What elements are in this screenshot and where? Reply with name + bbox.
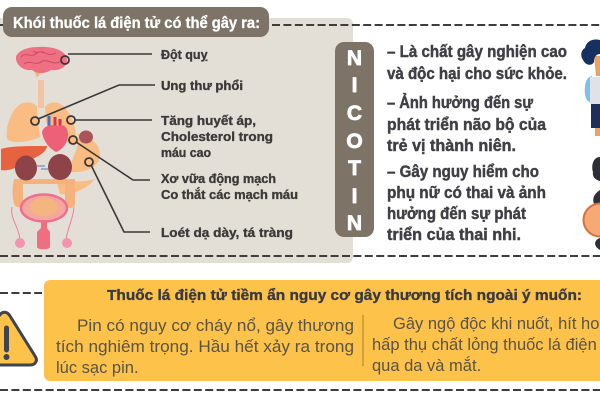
heading: organ effects: Khói thuốc lá điện tử có thể gây ra: xyxy=(13,15,260,32)
text block: brain development: phát triển não bộ của xyxy=(387,116,547,134)
text block: battery risk: Pin có nguy cơ cháy nổ, gây thương xyxy=(77,317,354,335)
text block: battery risk xyxy=(56,317,354,377)
text block: brain development: trẻ vị thành niên. xyxy=(387,137,516,155)
organ: stomach xyxy=(71,134,100,172)
connector: stroke xyxy=(61,54,152,64)
label: ulcers: Loét dạ dày, tá tràng xyxy=(161,226,293,240)
text block: nicotine addiction xyxy=(387,43,567,83)
connector: atherosclerosis xyxy=(69,136,150,180)
panel: organ effects background xyxy=(0,18,353,263)
heading: injury risk: Thuốc lá điện tử tiềm ẩn nguy cơ gây thương tích ngoài ý muốn: xyxy=(107,287,582,304)
vertical label: NICOTIN: I xyxy=(352,74,357,97)
label: stroke: Đột quỵ xyxy=(161,48,208,62)
organ: spleen xyxy=(79,130,93,144)
text block: pregnancy risk: phụ nữ có thai và ảnh xyxy=(387,184,546,202)
text block: poisoning risk xyxy=(372,315,600,375)
connector: hypertension xyxy=(67,116,152,124)
organ: heart xyxy=(42,116,68,152)
text block: pregnancy risk: – Gây nguy hiểm cho xyxy=(387,163,539,181)
label: hypertension and cholesterol: Cholesterol trong xyxy=(161,130,273,144)
icon: pregnant woman xyxy=(584,157,600,250)
panel: unintended injury risk xyxy=(44,280,600,381)
text block: poisoning risk: qua da và mắt. xyxy=(372,356,481,375)
vertical label: NICOTIN: T xyxy=(348,157,361,180)
text block: brain development xyxy=(387,93,547,155)
label: lung cancer: Ung thư phổi xyxy=(161,79,243,93)
vertical label: NICOTIN: I xyxy=(352,185,357,208)
icon: schoolchild xyxy=(581,39,600,136)
vertical label: NICOTIN: O xyxy=(346,130,363,153)
text block: pregnancy risk: hưởng đến sự phát xyxy=(387,205,526,223)
text block: pregnancy risk xyxy=(387,163,546,244)
organ: brain xyxy=(16,47,67,78)
organ: kidneys xyxy=(15,154,72,180)
label: atherosclerosis and vasoconstriction: Xơ vữa động mạch xyxy=(161,172,276,186)
organ: pancreas and small bowel xyxy=(56,179,95,194)
organ: liver xyxy=(1,146,47,170)
organ: intestine xyxy=(12,179,75,208)
heading: organ effects xyxy=(3,7,269,37)
text block: brain development: – Ảnh hưởng đến sự xyxy=(387,93,533,112)
illustration: human organs xyxy=(1,47,100,249)
organ: trachea xyxy=(38,80,44,108)
label: atherosclerosis and vasoconstriction: Co thắt các mạch máu xyxy=(161,187,298,202)
icon: warning triangle xyxy=(0,312,36,365)
label: hypertension and cholesterol xyxy=(161,114,273,160)
connector: ulcers xyxy=(85,158,150,232)
vertical label: NICOTIN xyxy=(335,42,374,237)
text block: nicotine addiction: và độc hại cho sức khỏe. xyxy=(387,65,567,83)
organ: lungs xyxy=(7,102,76,146)
label: hypertension and cholesterol: Tăng huyết áp, xyxy=(161,114,256,128)
text block: battery risk: tích nghiêm trọng. Hầu hết xảy ra trong xyxy=(56,338,354,356)
label: atherosclerosis and vasoconstriction xyxy=(161,172,298,202)
label: hypertension and cholesterol: máu cao xyxy=(161,146,211,160)
text block: nicotine addiction: – Là chất gây nghiện cao xyxy=(387,43,567,61)
connector: lung cancer xyxy=(31,85,155,125)
vertical label: NICOTIN: N xyxy=(347,47,362,70)
vertical label: NICOTIN: C xyxy=(347,102,362,125)
text block: battery risk: lúc sạc pin. xyxy=(56,359,139,377)
vertical label: NICOTIN: N xyxy=(347,212,362,235)
text block: pregnancy risk: triển của thai nhi. xyxy=(387,226,521,244)
organ: pelvis and reproductive system xyxy=(12,194,74,249)
